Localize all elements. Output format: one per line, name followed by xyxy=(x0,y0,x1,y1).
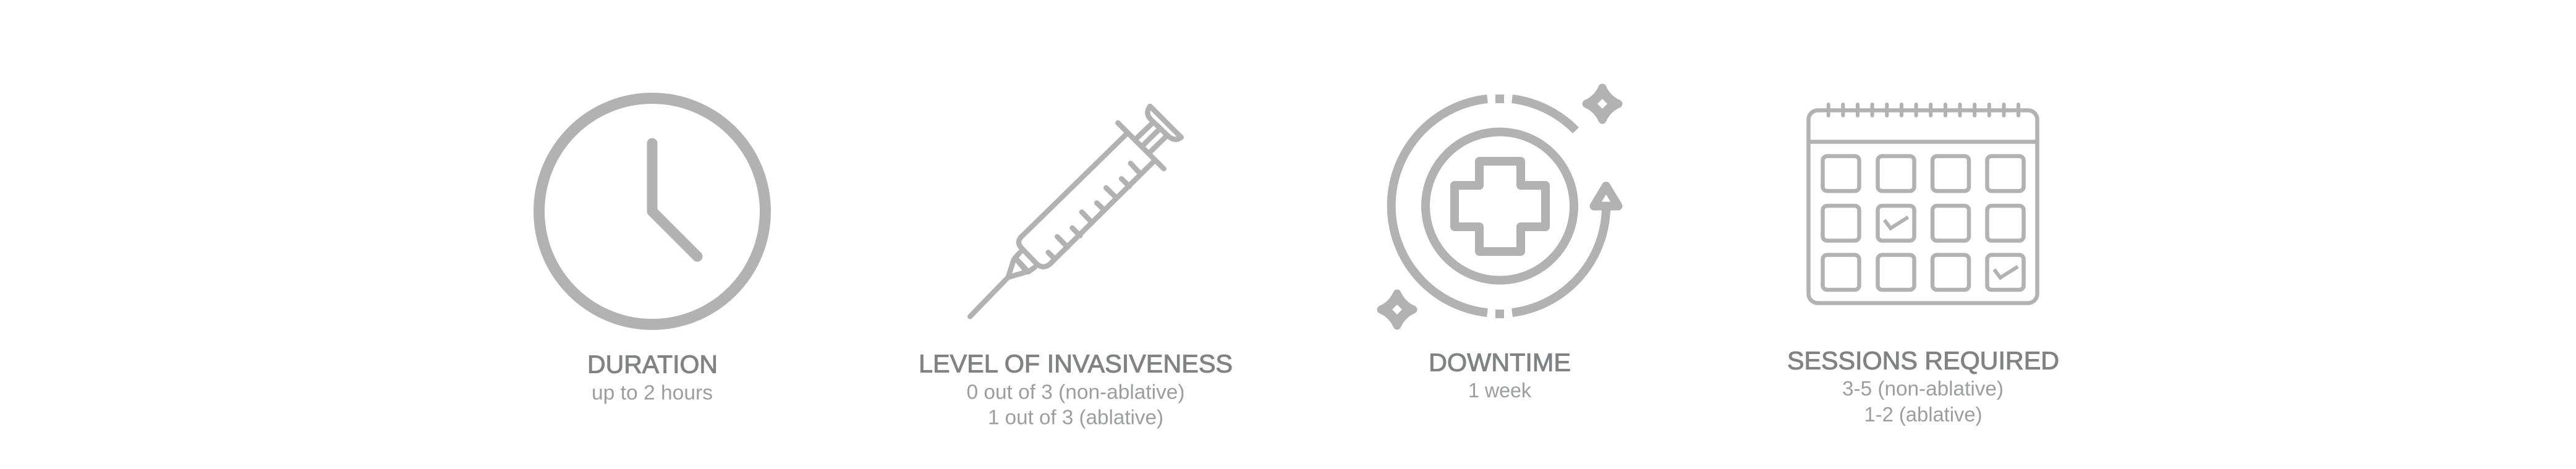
text: sessions ablative: 1-2 (ablative) xyxy=(1864,404,1982,426)
text: sessions non-ablative: 3-5 (non-ablative) xyxy=(1842,378,2004,400)
heading: level of invasiveness: LEVEL OF INVASIVENESS xyxy=(919,350,1233,378)
panel: level of invasiveness xyxy=(919,106,1233,429)
panel: duration xyxy=(539,98,765,404)
text: downtime value: 1 week xyxy=(1468,379,1531,402)
icon: syringe xyxy=(970,106,1181,316)
icon: recovery cross xyxy=(1381,88,1618,326)
text: invasiveness ablative: 1 out of 3 (ablative) xyxy=(988,407,1163,429)
panel: downtime xyxy=(1381,88,1618,402)
icon: calendar xyxy=(1809,104,2038,303)
heading: sessions required: SESSIONS REQUIRED xyxy=(1787,346,2059,374)
panel: sessions required xyxy=(1787,104,2059,426)
heading: duration: DURATION xyxy=(587,350,718,378)
text: invasiveness non-ablative: 0 out of 3 (non-ablative) xyxy=(967,381,1184,404)
heading: downtime: DOWNTIME xyxy=(1429,349,1571,377)
icon: clock xyxy=(539,98,765,324)
text: duration value: up to 2 hours xyxy=(592,382,713,404)
